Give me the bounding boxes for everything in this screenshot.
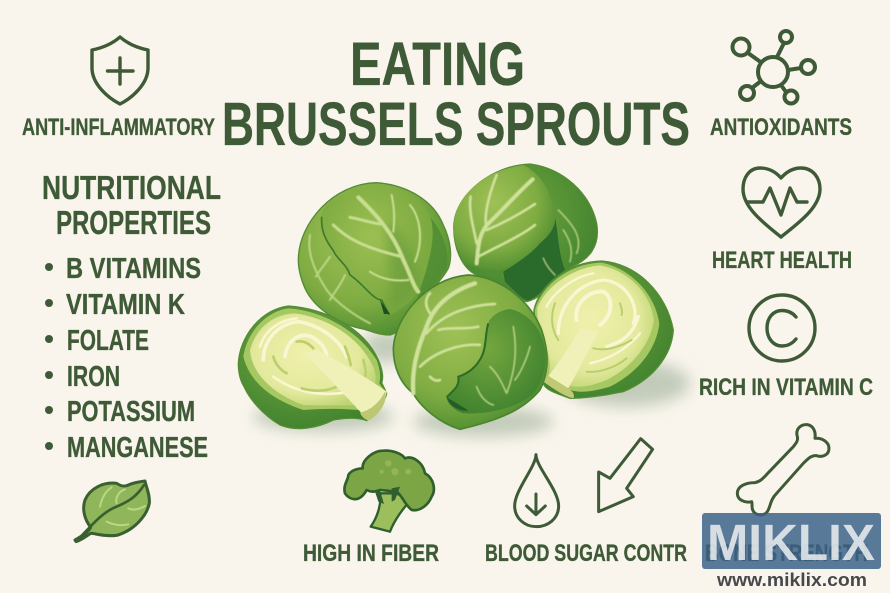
list item: vitamin K: VITAMIN K bbox=[66, 289, 185, 321]
label: high in fiber: HIGH IN FIBER bbox=[303, 540, 439, 567]
title bbox=[222, 30, 690, 158]
sprout: right cut half bbox=[534, 261, 673, 398]
heading: nutritional properties bbox=[42, 169, 221, 241]
ground shadows bbox=[253, 330, 690, 437]
icon: down-left arrow bbox=[599, 439, 653, 512]
watermark panel bbox=[702, 513, 881, 569]
title: BRUSSELS SPROUTS bbox=[222, 90, 690, 158]
list item: folate: FOLATE bbox=[67, 325, 149, 357]
cut stem bbox=[548, 328, 598, 388]
watermark url: www.miklix.com bbox=[716, 570, 867, 590]
label: anti-inflammatory: ANTI-INFLAMMATORY bbox=[22, 114, 215, 141]
sprout: left cut half bbox=[238, 306, 387, 429]
watermark: Miklix badge bbox=[702, 513, 881, 590]
sprout: top right whole bbox=[454, 164, 597, 302]
illustration: brussels sprouts bbox=[238, 164, 690, 437]
list: nutrients bbox=[45, 253, 208, 464]
label: blood sugar control, clipped: BLOOD SUGAR CONTR bbox=[485, 540, 687, 567]
icon: water drop with down arrow bbox=[515, 455, 559, 527]
icon: vitamin C circle bbox=[749, 295, 815, 361]
heading: nutritional properties: NUTRITIONAL bbox=[42, 169, 221, 206]
list item: manganese: MANGANESE bbox=[67, 432, 208, 464]
watermark wordmark: MIKLIX bbox=[707, 514, 875, 571]
sprout: top left whole bbox=[298, 183, 451, 335]
list item: potassium bbox=[45, 396, 195, 428]
list item: iron: IRON bbox=[67, 361, 120, 393]
panel: nutritional properties bbox=[42, 169, 221, 464]
icon: leaf bbox=[75, 481, 149, 542]
cut stem bbox=[305, 350, 387, 415]
list item: iron bbox=[45, 361, 120, 393]
icon: bone bbox=[737, 425, 829, 515]
label: antioxidants: ANTIOXIDANTS bbox=[710, 114, 852, 141]
list item: folate bbox=[45, 325, 149, 357]
title: EATING bbox=[350, 30, 525, 98]
list item: manganese bbox=[45, 432, 208, 464]
list item: B vitamins: B VITAMINS bbox=[66, 253, 201, 285]
icon: shield with plus bbox=[92, 37, 148, 104]
sprout: centre whole bbox=[393, 275, 547, 429]
heading: nutritional properties: PROPERTIES bbox=[56, 204, 211, 241]
icon: molecule bbox=[732, 31, 815, 104]
list item: potassium: POTASSIUM bbox=[67, 396, 195, 428]
icon: heart with pulse bbox=[743, 168, 820, 237]
icon: broccoli bbox=[344, 451, 434, 532]
